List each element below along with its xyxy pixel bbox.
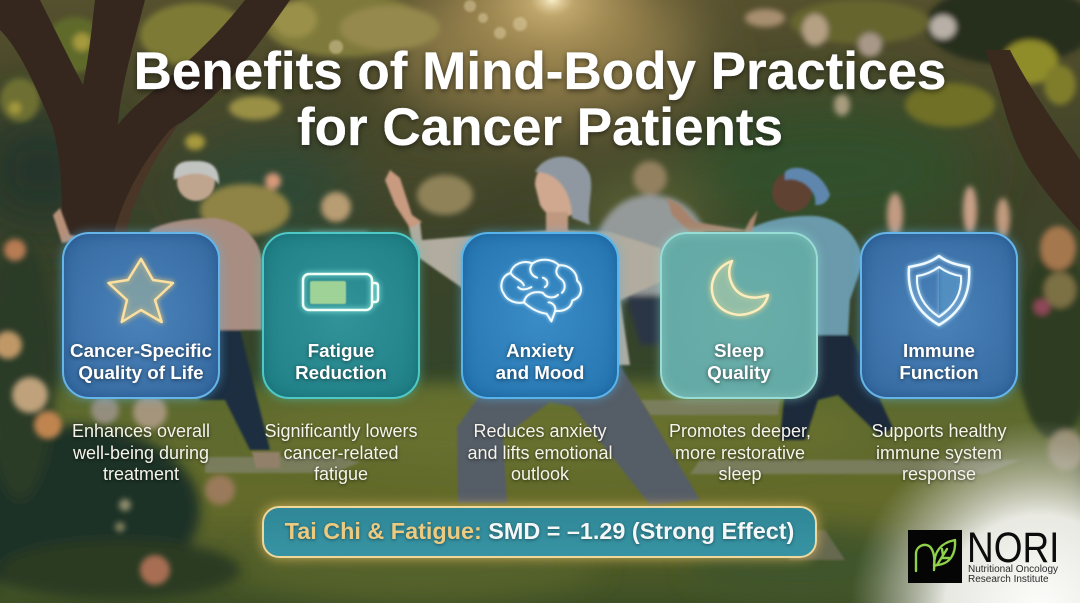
text: immune description bbox=[871, 421, 1008, 486]
logo: NORI bbox=[908, 524, 1059, 584]
background person far-left bbox=[310, 192, 368, 250]
heading: fatigue reduction bbox=[294, 340, 388, 383]
distant flowers bbox=[200, 173, 1010, 238]
mist behind logo bbox=[850, 420, 1080, 603]
tagline bbox=[968, 564, 1058, 584]
icon: star bbox=[104, 254, 178, 326]
bokeh dots bbox=[329, 0, 527, 54]
person left bbox=[53, 161, 280, 468]
foliage top-left bbox=[0, 0, 440, 150]
grass bbox=[0, 385, 1080, 603]
heading: cancer-specific quality of life bbox=[68, 340, 213, 386]
flowers left foreground bbox=[0, 240, 240, 600]
heading: sleep quality: Sleep bbox=[714, 340, 764, 361]
panel: sleep quality bbox=[660, 232, 818, 399]
sun glow bbox=[442, 0, 662, 80]
heading: fatigue reduction: Reduction bbox=[295, 362, 387, 383]
text: anxiety description: outlook bbox=[511, 464, 569, 484]
heading: anxiety and mood: and Mood bbox=[496, 362, 584, 383]
panel: cancer-specific quality of life bbox=[62, 232, 220, 399]
text: sleep description bbox=[668, 421, 811, 486]
text: immune description: immune system bbox=[876, 443, 1002, 463]
background person centre-right bbox=[598, 161, 705, 350]
heading: immune function: Function bbox=[899, 362, 979, 383]
icon: crescent moon bbox=[706, 256, 772, 320]
panel: fatigue reduction bbox=[262, 232, 420, 399]
text: quality of life description: well-being during bbox=[73, 443, 209, 463]
tree trunks left bbox=[0, 0, 290, 240]
tagline: Research Institute bbox=[968, 574, 1049, 584]
icon: leaf mark bbox=[908, 530, 962, 583]
person right bbox=[667, 168, 893, 440]
callout: tai chi statistic bbox=[262, 506, 817, 558]
heading: cancer-specific quality of life: Cancer-Specific bbox=[70, 340, 212, 361]
text: sleep description: Promotes deeper, bbox=[669, 421, 811, 441]
text: quality of life description: Enhances overall bbox=[72, 421, 210, 441]
wordmark: NORI bbox=[967, 524, 1059, 572]
heading: cancer-specific quality of life: Quality of Life bbox=[78, 362, 204, 383]
heading: immune function: Immune bbox=[903, 340, 975, 361]
text: quality of life description: treatment bbox=[103, 464, 179, 484]
heading: sleep quality: Quality bbox=[707, 362, 771, 383]
foliage top-right bbox=[745, 0, 1080, 127]
callout: tai chi statistic: Tai Chi & Fatigue: SMD = –1.29 (Strong Effect) bbox=[285, 518, 794, 544]
text: fatigue description bbox=[264, 421, 418, 486]
title: Benefits of Mind-Body Practices bbox=[134, 42, 946, 101]
trunk right bbox=[985, 50, 1080, 232]
text: fatigue description: cancer-related bbox=[283, 443, 399, 463]
flowers right bbox=[1017, 226, 1080, 470]
tagline: Nutritional Oncology bbox=[968, 564, 1058, 575]
text: immune description: response bbox=[902, 464, 976, 484]
text: sleep description: sleep bbox=[718, 464, 762, 484]
text: fatigue description: Significantly lowers bbox=[264, 421, 418, 441]
icon: battery bbox=[298, 269, 383, 315]
main person bbox=[385, 157, 700, 505]
yoga mats bbox=[205, 400, 1020, 560]
text: quality of life description bbox=[72, 421, 210, 484]
text: anxiety description: and lifts emotional bbox=[467, 443, 613, 463]
icon: brain bbox=[498, 256, 584, 324]
panel: anxiety and mood bbox=[461, 232, 619, 399]
panel: immune function bbox=[860, 232, 1018, 399]
text: sleep description: more restorative bbox=[675, 443, 805, 463]
text: anxiety description: Reduces anxiety bbox=[473, 421, 607, 441]
text: anxiety description bbox=[467, 421, 613, 484]
text: immune description: Supports healthy bbox=[871, 421, 1007, 441]
heading: anxiety and mood: Anxiety bbox=[506, 340, 574, 361]
text: fatigue description: fatigue bbox=[314, 464, 368, 484]
heading: immune function bbox=[898, 340, 980, 383]
heading: fatigue reduction: Fatigue bbox=[308, 340, 374, 361]
heading: anxiety and mood bbox=[494, 340, 586, 383]
icon: shield bbox=[904, 252, 974, 328]
heading: sleep quality bbox=[705, 340, 772, 386]
title: for Cancer Patients bbox=[297, 98, 783, 157]
title bbox=[134, 42, 946, 157]
